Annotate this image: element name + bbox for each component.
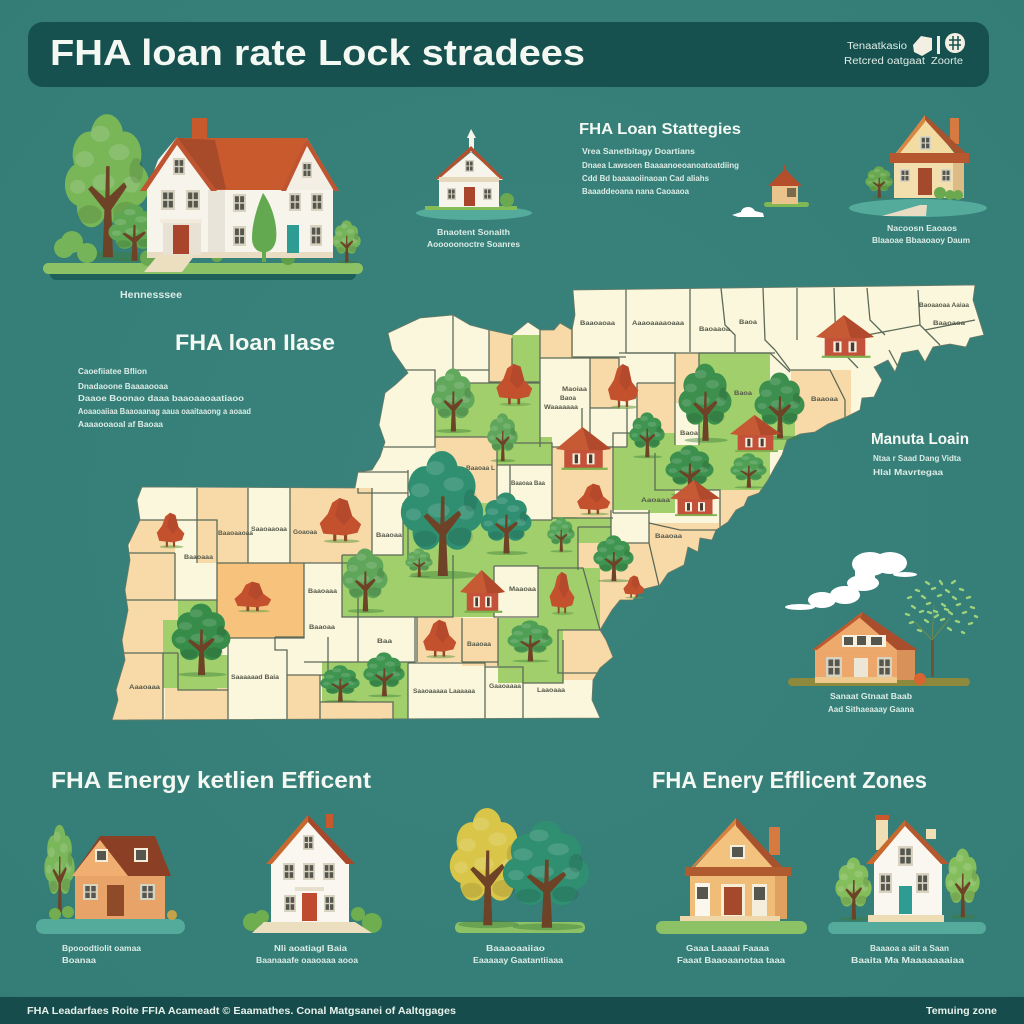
house: [435, 129, 514, 207]
porch and door: [160, 219, 202, 255]
tree: [730, 453, 767, 488]
caption: Aad Sithaeaaay Gaana: [828, 704, 914, 714]
text block: FHA Loan Stattegies: Vrea Sanetbitagy Doartians: [582, 146, 695, 156]
red house: [730, 415, 781, 452]
caption: [872, 223, 970, 245]
map labels: Baaoaa Baa: [511, 481, 546, 487]
yellow tree: [450, 808, 524, 928]
text block: FHA loan Ilase: Aoaaoaiiaa Baaoaanag aaua oaaitaaong a aoaad: [78, 406, 251, 416]
map labels: Aaaoaaa: [129, 685, 161, 691]
red house: [670, 480, 720, 516]
ground: [416, 206, 532, 220]
strong peach county: [217, 563, 304, 638]
panel: bottom house 1: [36, 825, 185, 965]
panel: small chapel house: [416, 129, 532, 249]
map labels: Baoaaoaa Aaiaa: [919, 303, 970, 309]
tree: [755, 373, 804, 440]
caption: [427, 227, 520, 249]
caption: Bnaotent Sonaith: [437, 227, 510, 237]
cone tree: [252, 193, 276, 262]
tree: [547, 517, 575, 552]
map labels: Baaoaa: [655, 534, 683, 540]
map labels: Gaaoaaaa: [489, 684, 522, 690]
house: [266, 814, 355, 922]
tree: [109, 204, 159, 262]
caption: Blaaoae Bbaaoaoy Daum: [872, 235, 970, 245]
header bar: [28, 22, 989, 87]
footer note: Temuing zone: [926, 1005, 997, 1017]
ground: [36, 919, 185, 934]
caption: Baanaaafe oaaoaaa aooa: [256, 955, 358, 965]
tree: [481, 492, 531, 555]
map labels: Baoa: [739, 320, 758, 326]
map labels: Baoa: [734, 391, 753, 397]
red house: [556, 427, 611, 470]
ground: [455, 922, 585, 933]
map labels: Laaoaaa: [537, 688, 566, 694]
heading: FHA Energy: FHA Energy ketlien Efficent: [51, 767, 371, 793]
bushes: [243, 907, 382, 933]
text block: FHA loan Ilase: Daaoe Boonao daaa baaoaaoaatiaoo: [78, 393, 244, 403]
ground: [656, 921, 807, 934]
tree: [835, 858, 872, 921]
map labels: Baaoaoa: [933, 321, 966, 327]
map labels: Baoa: [680, 431, 699, 437]
panel: main house illustration: [43, 114, 363, 280]
text block: FHA loan Ilase: [78, 330, 335, 429]
text block: Manuta Loan: Hlal Mavrtegaa: [873, 467, 943, 477]
steps: [144, 255, 195, 272]
map labels: Baaoaoaa: [580, 321, 616, 327]
map outline: [112, 285, 984, 720]
panel: top-right cottage: [849, 115, 987, 245]
red marker: [550, 572, 574, 615]
house: [140, 118, 339, 272]
text block: FHA Loan Stattegies: Dnaea Lawsoen Baaaanoeoanoatoatdiing: [582, 160, 739, 170]
map labels: Baaoaa: [811, 397, 839, 403]
tree: [665, 445, 714, 496]
text block: Manuta Loan: [871, 431, 969, 477]
red marker: [623, 575, 645, 599]
tree: [342, 549, 388, 613]
caption: Eaaaaay Gaatantiiaaa: [473, 955, 563, 965]
tree: [487, 413, 518, 462]
tree: [332, 220, 361, 263]
steps: [252, 922, 372, 933]
panel: bottom house 2: [243, 814, 382, 965]
text block: FHA loan Ilase: Aaaaooaoal af Baoaa: [78, 419, 163, 429]
ground: [788, 678, 970, 686]
caption: [828, 691, 914, 714]
header note: [844, 41, 963, 67]
map labels: Maoiaa: [562, 387, 588, 393]
teal door: [287, 225, 299, 253]
text block: FHA Loan Stattegies: Cdd Bd baaaaoiinaoan Cad aliahs: [582, 173, 709, 183]
caption: Boanaa: [62, 955, 96, 965]
label: main house: Hennesssee: [120, 290, 182, 301]
caption: Sanaat Gtnaat Baab: [830, 691, 912, 701]
header note: Retcred oatgaat: [844, 56, 925, 67]
map labels: Saaoaaoaa: [251, 527, 288, 533]
caption: [677, 943, 785, 965]
sparse tree: [906, 581, 977, 677]
header note: Zoorte: [931, 56, 963, 67]
caption: [256, 943, 358, 965]
map labels: Baaoaa: [309, 625, 336, 631]
map labels: Baaoaaoaa: [218, 531, 254, 537]
header note: Tenaatkasio: [847, 41, 907, 52]
house: [866, 815, 949, 922]
heading: Efficient Zones: FHA Enery Efflicent Zones: [652, 767, 927, 793]
map labels: [129, 303, 970, 695]
tree: [679, 364, 731, 443]
text block: FHA Loan Stattegies: FHA Loan Stattegies: [579, 121, 741, 138]
map labels: Waaaaaaa: [544, 405, 579, 411]
caption: Faaat Baaoaanotaa taaa: [677, 955, 785, 965]
panel: bottom house 4: [656, 818, 807, 965]
red house: [460, 570, 505, 613]
red marker: [320, 498, 361, 543]
map labels: Aaaoaaaaoaaa: [632, 321, 685, 327]
caption: Baaaoa a aiit a Saan: [870, 943, 949, 953]
map labels: Baoaaoa: [699, 327, 731, 333]
windows: [161, 158, 323, 246]
text block: FHA loan Ilase: Dnadaoone Baaaaooaa: [78, 381, 168, 391]
caption: [473, 943, 563, 965]
footer text: FHA Leadarfaes Roite FFIA Acameadt © Eaamathes. Conal Matgsanei of Aaltqgages: [27, 1005, 456, 1017]
map labels: Baaoaaa: [184, 555, 214, 561]
ground: [849, 199, 987, 217]
tree: [401, 451, 483, 579]
tree: [363, 652, 405, 697]
cottage: [890, 115, 969, 200]
house: [49, 836, 177, 920]
red marker: [157, 513, 184, 548]
panel: lower-right house with cloud: [785, 552, 977, 714]
map labels: Baaoaa L: [466, 466, 495, 472]
footer bar: [0, 997, 1024, 1024]
red marker: [608, 364, 638, 409]
panel: bottom trees: [450, 808, 589, 965]
red marker: [577, 484, 610, 515]
icon: small hut with cloud: [732, 165, 809, 217]
tree: [945, 849, 980, 919]
ground: [828, 922, 986, 934]
caption: Gaaa Laaaai Faaaa: [686, 943, 769, 953]
map labels: Baa: [377, 639, 393, 645]
green tree: [503, 821, 589, 930]
tree: [431, 369, 475, 433]
red marker: [234, 582, 271, 612]
tree: [405, 548, 433, 578]
caption: [62, 943, 141, 965]
tree: [44, 825, 75, 915]
county borders: [123, 288, 975, 723]
path: [882, 205, 927, 216]
red marker: [423, 620, 456, 658]
text block: FHA loan Ilase: Caoefiiatee Bflion: [78, 366, 147, 376]
title: FHA loan rate Lock stradees: [50, 32, 585, 73]
county cells: [105, 288, 975, 725]
map labels: Baaoaa: [467, 642, 492, 648]
bushes: [54, 231, 295, 266]
caption: Baaita Ma Maaaaaaaiaa: [851, 955, 964, 965]
panel: bottom house 5: [828, 815, 986, 965]
map labels: Goaoaa: [293, 530, 318, 536]
tree: [593, 535, 634, 582]
map labels: Baaoaaa: [308, 589, 338, 595]
map labels: Maaoaa: [509, 587, 537, 593]
text block: Manuta Loan: Manuta Loain: [871, 431, 969, 448]
caption: Aooooonoctre Soanres: [427, 239, 520, 249]
map labels: Aaoaaa: [641, 498, 671, 504]
tree: [65, 114, 149, 261]
house: [812, 612, 926, 685]
map labels: Baoa: [560, 396, 577, 402]
text block: FHA Loan Stattegies: Baaaddeoana nana Caoaaoa: [582, 186, 689, 196]
caption: Nacoosn Eaoaos: [887, 223, 957, 233]
map base: [112, 285, 984, 720]
tree: [172, 604, 230, 677]
red marker: [496, 364, 532, 406]
cloud: [785, 552, 917, 610]
text block: FHA loan Ilase: FHA loan Ilase: [175, 330, 335, 355]
icon: header badge: [913, 33, 965, 56]
caption: Bpooodtiolit oamaa: [62, 943, 141, 953]
text block: FHA Loan Stattegies: [579, 121, 741, 196]
map labels: Saaoaaaaa Laaaaaa: [413, 689, 476, 695]
caption: [851, 943, 964, 965]
map labels: Baaoaa: [376, 533, 403, 539]
house: [680, 818, 792, 921]
tree: [507, 620, 553, 662]
ground: [43, 263, 363, 280]
red house: [816, 315, 874, 358]
map labels: Saaaaaad Baia: [231, 675, 280, 681]
tree: [629, 412, 665, 458]
tree: [320, 665, 360, 702]
caption: Nli aoatiagl Baia: [274, 943, 347, 953]
map of counties: [105, 285, 984, 725]
tree: [865, 166, 893, 198]
text block: Manuta Loan: Ntaa r Saad Dang Vidta: [873, 453, 961, 463]
caption: Baaaoaaiiao: [486, 943, 545, 953]
